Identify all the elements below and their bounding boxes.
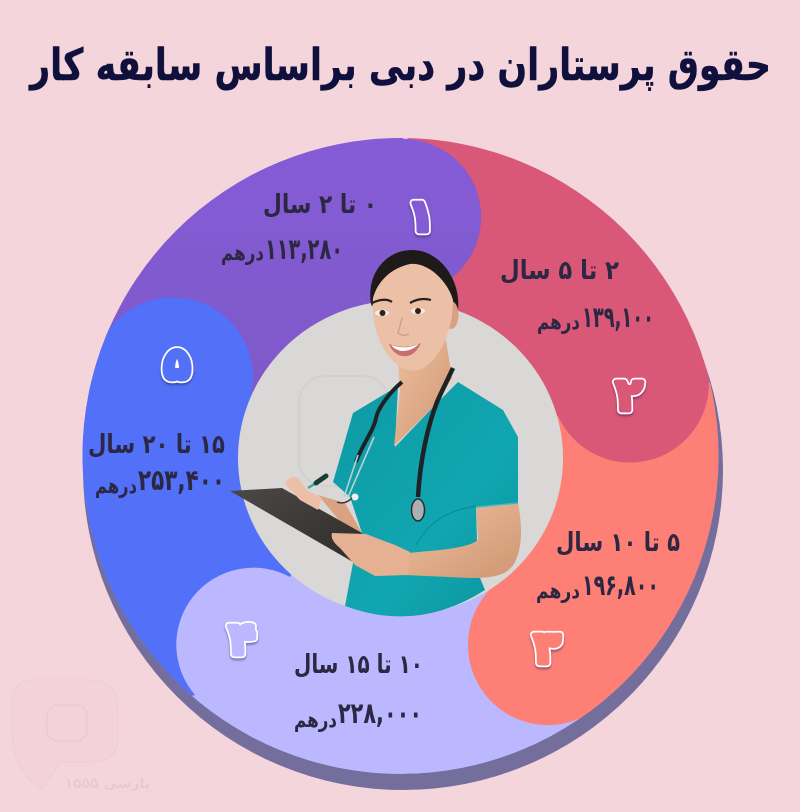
clipboard xyxy=(230,488,362,562)
upper arm and forearm xyxy=(405,503,521,578)
item 2 text: ۲ تا ۵ سال xyxy=(500,256,619,286)
segment 4 lavender base xyxy=(82,138,718,774)
writing hand xyxy=(285,477,322,510)
teeth xyxy=(391,344,419,351)
item 3 text: ۱۹۶,۸۰۰ xyxy=(582,568,659,602)
item 1 text: درهم xyxy=(221,241,264,265)
faint watermark in circle xyxy=(299,376,389,486)
number 2: ۲ xyxy=(616,370,643,421)
hair back xyxy=(370,250,458,316)
item 3 text: ۵ تا ۱۰ سال xyxy=(556,528,680,558)
eyes xyxy=(375,308,425,316)
nurse illustration xyxy=(230,250,521,616)
item 3 text: درهم xyxy=(536,579,580,603)
segment 2 red xyxy=(408,138,710,462)
watermark logo bottom left: پارسی ۱۵۵۵ xyxy=(64,776,150,792)
segment 3 coral xyxy=(468,384,718,726)
donut segments xyxy=(82,138,718,774)
stethoscope ear piece xyxy=(337,494,358,503)
item 2 text xyxy=(500,256,654,334)
ring drop shadow xyxy=(83,150,723,790)
neck and chest xyxy=(394,340,452,446)
item 4 text: درهم xyxy=(294,708,337,732)
item 4 text: ۱۰ تا ۱۵ سال xyxy=(294,650,423,680)
left forearm xyxy=(318,495,362,533)
item 5 text xyxy=(88,430,225,498)
centre grey circle xyxy=(238,300,563,616)
mouth xyxy=(389,343,421,356)
item 4 text: ۲۲۸,۰۰۰ xyxy=(338,696,422,730)
pen xyxy=(308,476,326,488)
scrub fold line xyxy=(416,506,476,545)
sleeve cuff line xyxy=(476,503,518,507)
face xyxy=(373,264,453,371)
item 5 text: ۱۵ تا ۲۰ سال xyxy=(88,430,225,460)
item 5 text: درهم xyxy=(95,474,137,498)
number 1: ۱ xyxy=(408,191,434,242)
item 1 text: ۱۱۳,۲۸۰ xyxy=(265,232,343,266)
stethoscope tube left xyxy=(356,382,402,462)
number 3: ۳ xyxy=(534,623,561,674)
item 1 text: ۰ تا ۲ سال xyxy=(263,190,377,220)
chest piece xyxy=(412,499,424,521)
watermark logo bottom left xyxy=(12,680,150,792)
item 4 text xyxy=(294,650,423,732)
item 1 text xyxy=(221,190,377,266)
number 4: ۴ xyxy=(229,614,255,665)
stethoscope tube right xyxy=(418,368,453,497)
item 5 text: ۲۵۳,۴۰۰ xyxy=(138,463,225,497)
eyebrows xyxy=(372,299,431,303)
ear xyxy=(444,301,458,329)
number 5: ۵ xyxy=(164,339,190,390)
item 2 text: ۱۳۹,۱۰۰ xyxy=(582,300,654,334)
holding hand xyxy=(332,533,410,576)
scrub top xyxy=(333,382,518,616)
nose xyxy=(398,318,409,335)
segment 5 blue xyxy=(82,297,292,696)
stethoscope metal tubes xyxy=(344,437,374,497)
item 2 text: درهم xyxy=(537,310,580,334)
segment 1 purple xyxy=(82,138,482,466)
number 4: ۴ xyxy=(229,614,255,665)
number 3: ۳ xyxy=(534,623,561,674)
number 1: ۱ xyxy=(408,191,434,242)
item 3 text xyxy=(536,528,680,603)
number 5: ۵ xyxy=(164,339,190,390)
number 2: ۲ xyxy=(616,370,643,421)
